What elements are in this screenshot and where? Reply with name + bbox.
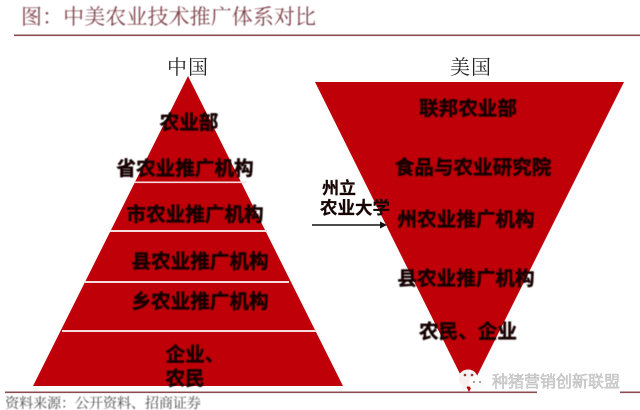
title rule [14, 34, 640, 36]
tier labels: 省农业推广机构 [116, 158, 254, 180]
tier labels: 联邦农业部 [419, 97, 517, 120]
heading: China: 中国 [167, 56, 209, 79]
tier labels: 企业、 [166, 343, 224, 366]
inverted pyramid shape [315, 82, 624, 392]
tier dividers [62, 182, 316, 332]
callout: state agricultural universities: 州立 [322, 178, 356, 198]
tier labels: 食品与农业研究院 [395, 156, 552, 179]
callout: state agricultural universities: 农业大学 [320, 198, 390, 218]
panel: China pyramid [33, 56, 343, 390]
tier labels: 乡农业推广机构 [131, 290, 269, 313]
tier labels [116, 111, 269, 390]
watermark [458, 370, 620, 391]
tier labels: 州农业推广机构 [397, 209, 535, 231]
footer rule [5, 392, 640, 393]
tier labels: 县农业推广机构 [397, 268, 535, 290]
icon: chat bubbles [458, 370, 486, 391]
panel: USA inverted pyramid [315, 56, 624, 392]
tier labels: 县农业推广机构 [131, 251, 269, 273]
tier labels [395, 97, 552, 343]
title: 图：中美农业技术推广体系对比 [21, 5, 316, 29]
heading: USA: 美国 [450, 56, 492, 79]
arrow [312, 222, 387, 228]
tier labels: 农业部 [160, 111, 218, 134]
tier labels: 农民、企业 [419, 320, 517, 343]
pyramid shape [33, 76, 343, 386]
watermark text: 种猪营销创新联盟 [492, 373, 620, 391]
callout: state agricultural universities [312, 178, 390, 228]
tier labels: 农民 [165, 368, 205, 390]
tier labels: 市农业推广机构 [126, 203, 264, 226]
